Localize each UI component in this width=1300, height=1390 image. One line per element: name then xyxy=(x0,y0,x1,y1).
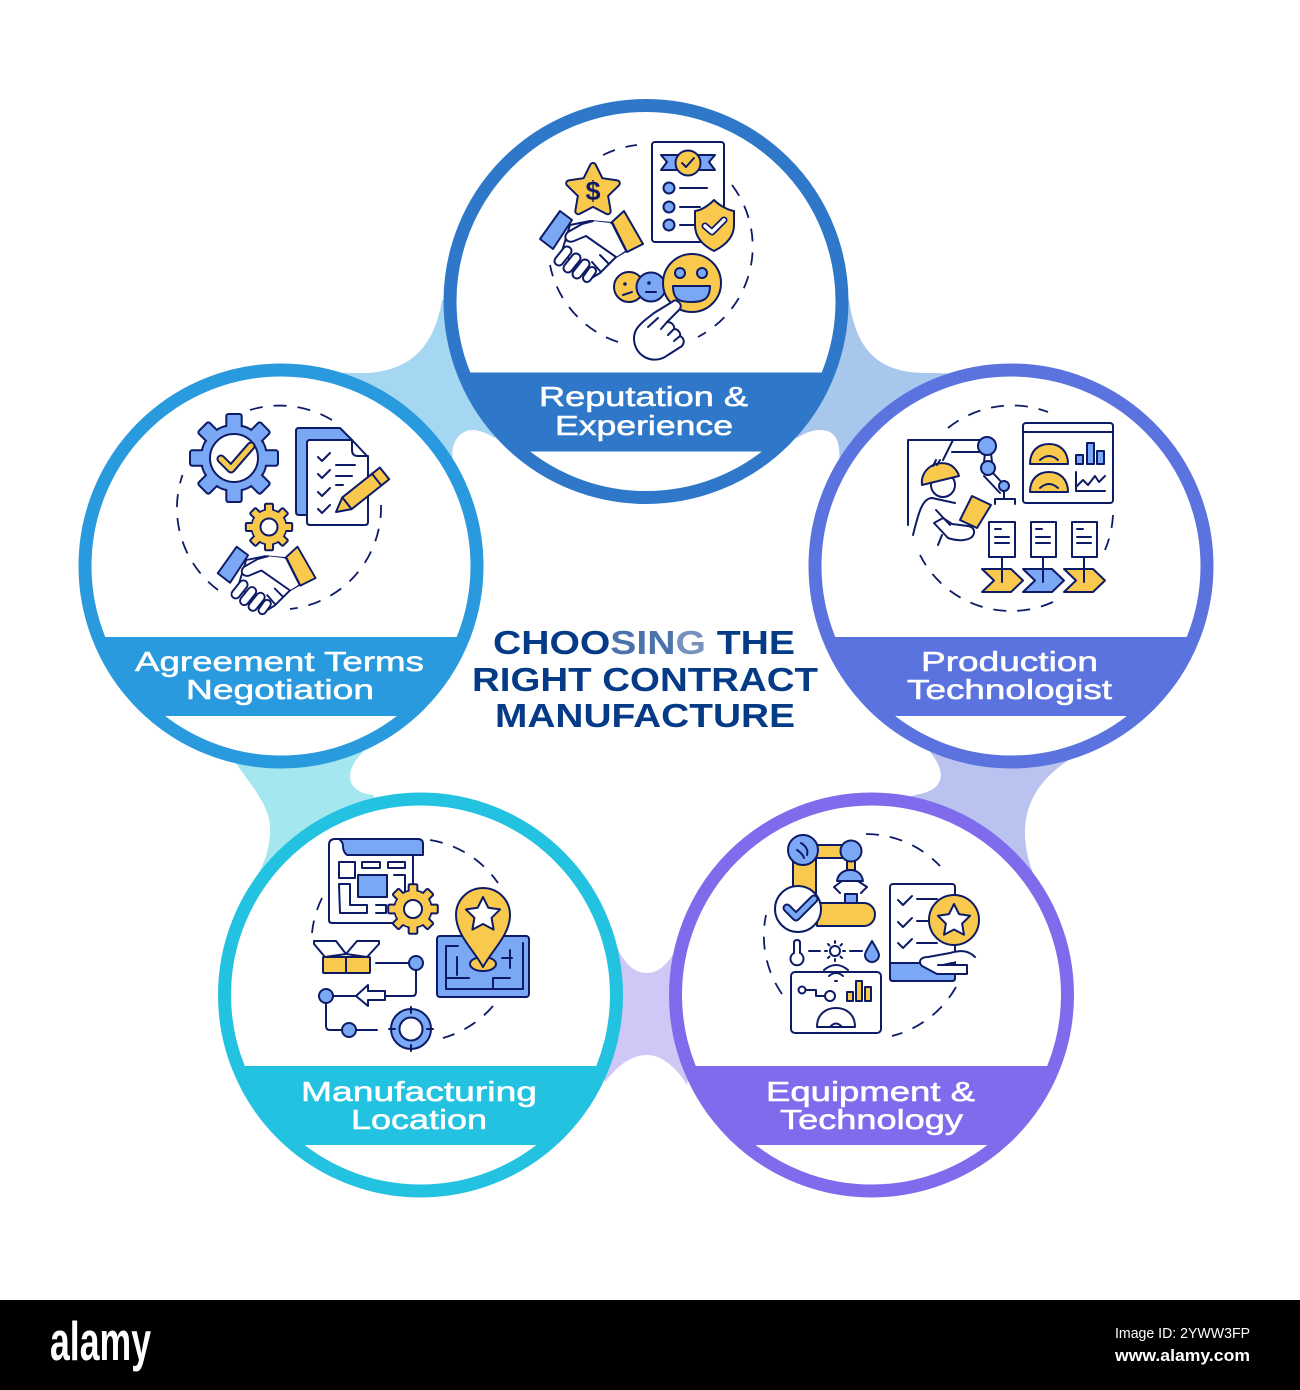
footer logo: alamy xyxy=(50,1310,151,1372)
handshake xyxy=(218,547,316,611)
title: CHOO SIN G THE xyxy=(493,624,795,661)
map with pin xyxy=(437,888,529,997)
sensors row xyxy=(790,940,879,965)
icon: technologist, robot arm, dashboard and process xyxy=(908,405,1113,611)
handshake xyxy=(540,211,643,279)
label text: Technology xyxy=(780,1104,963,1135)
label text: Negotiation xyxy=(186,674,374,705)
panel: reputation and experience xyxy=(450,106,842,498)
connector: location to equipment xyxy=(590,947,700,1085)
route xyxy=(319,956,423,1037)
pointing hand xyxy=(634,300,684,360)
connector: agreement to reputation xyxy=(332,300,520,470)
label band xyxy=(828,637,1194,716)
icon: handshake, star, certificate and smileys xyxy=(540,142,753,360)
hand with star medal xyxy=(920,895,979,974)
open box xyxy=(314,941,379,973)
label text: Technologist xyxy=(907,674,1112,705)
ring xyxy=(85,370,477,762)
label band xyxy=(98,637,464,716)
title: MANUFACTURE xyxy=(495,697,795,734)
worker xyxy=(913,460,991,545)
panel: production technologist xyxy=(815,370,1207,762)
website: www.alamy.com xyxy=(1114,1346,1250,1365)
yellow gear xyxy=(388,884,438,934)
control panel xyxy=(791,965,881,1033)
title xyxy=(472,624,818,734)
label text: Manufacturing xyxy=(301,1076,537,1107)
image id: Image ID: 2YWW3FP xyxy=(1115,1325,1250,1342)
panel: manufacturing location xyxy=(224,799,616,1191)
footer bar xyxy=(0,1300,1300,1390)
icon: gears, contract and handshake xyxy=(177,406,389,611)
label text: Location xyxy=(351,1104,487,1135)
dashboard xyxy=(1023,423,1113,503)
label text: Experience xyxy=(555,410,733,441)
small gear xyxy=(246,504,292,550)
icon: robot arm, sensors and checklist xyxy=(764,834,979,1036)
label band xyxy=(463,372,829,452)
label band xyxy=(238,1066,603,1145)
star with dollar xyxy=(569,166,617,211)
title: RIGHT CONTRACT xyxy=(472,661,818,698)
connector: agreement to location xyxy=(232,720,385,890)
floor plan xyxy=(329,839,423,923)
pencil xyxy=(331,468,389,518)
panel: agreement terms negotiation xyxy=(85,370,477,762)
icon: floor plan, gear, map pin and route xyxy=(312,839,529,1051)
label text xyxy=(135,646,424,705)
process chevrons and cards xyxy=(982,522,1105,592)
panel: equipment and technology xyxy=(676,799,1068,1191)
label text: Production xyxy=(921,646,1098,677)
label text xyxy=(766,1076,975,1135)
label text: Agreement Terms xyxy=(135,646,424,677)
smileys xyxy=(614,254,721,312)
robot arm xyxy=(908,437,1015,525)
ring xyxy=(224,799,616,1191)
ring xyxy=(815,370,1207,762)
checklist xyxy=(890,884,955,981)
large gear xyxy=(190,414,278,502)
label text xyxy=(301,1076,537,1135)
target xyxy=(389,1007,433,1051)
certificate xyxy=(652,142,724,242)
ring xyxy=(450,106,842,498)
label band xyxy=(689,1066,1054,1145)
label text xyxy=(907,646,1112,705)
ring xyxy=(676,799,1068,1191)
robot arm on conveyor xyxy=(775,835,875,932)
connector: reputation to production xyxy=(770,300,952,470)
connector: production to equipment xyxy=(900,720,1072,885)
label text xyxy=(539,381,748,441)
star with dollar: $ xyxy=(585,176,601,206)
shield xyxy=(695,200,734,251)
label text: Equipment & xyxy=(766,1076,975,1107)
contract document xyxy=(296,428,368,525)
label text: Reputation & xyxy=(539,381,748,412)
